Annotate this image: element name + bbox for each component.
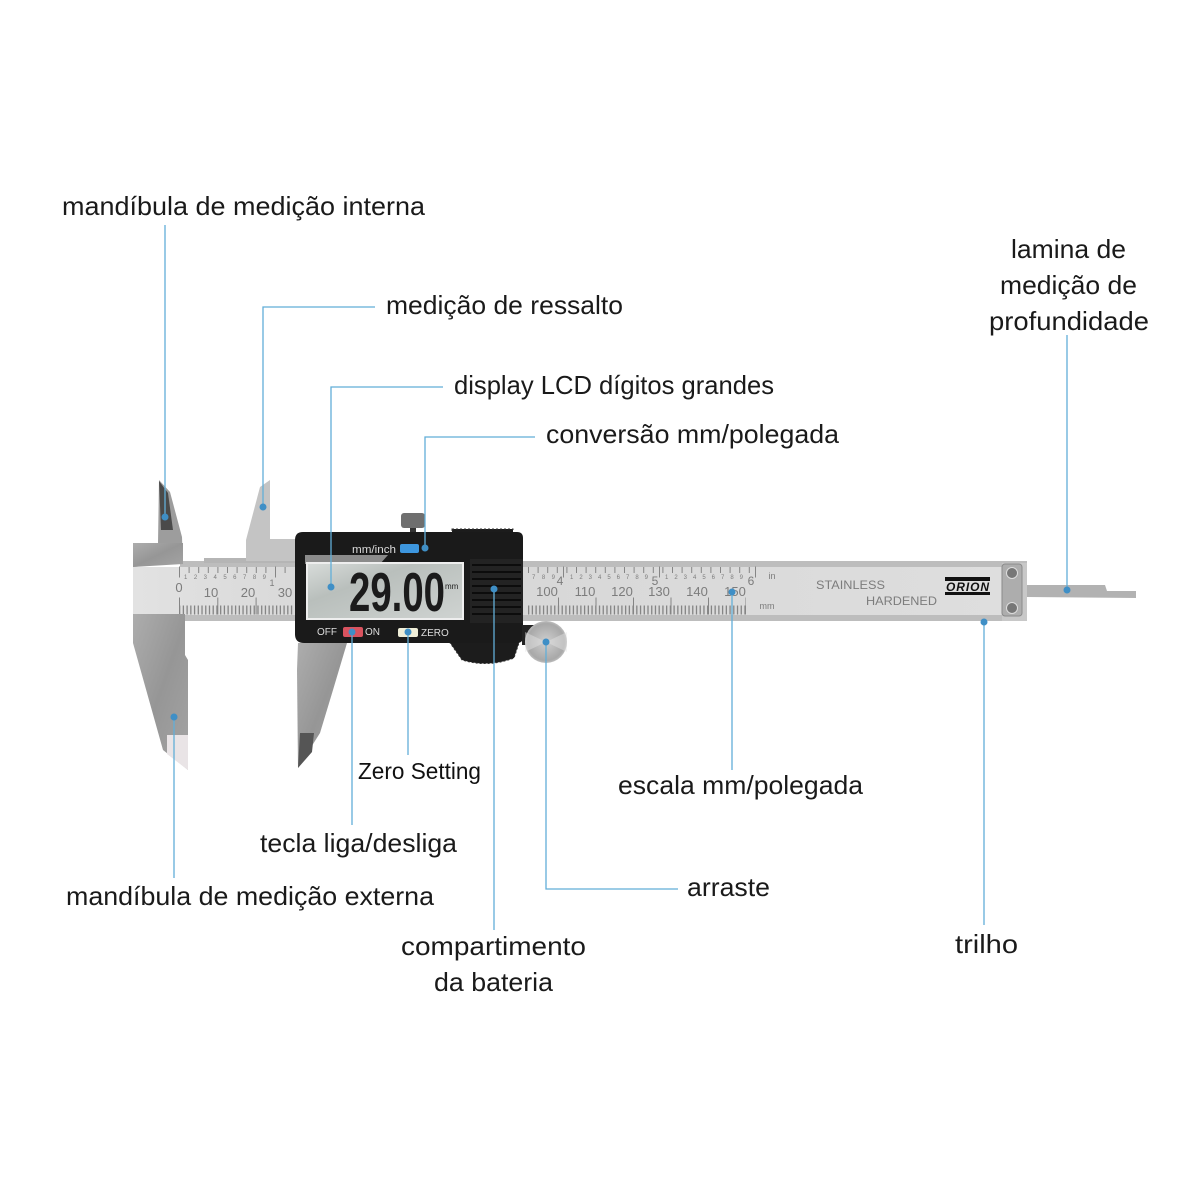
leader: thumb drag (542, 638, 678, 889)
LCD reading: 29.00 (349, 561, 445, 623)
ZERO label: ZERO (421, 628, 449, 639)
thumb screw (401, 513, 425, 533)
scale numbers (175, 571, 776, 611)
OFF label: OFF (317, 627, 337, 638)
label: depth measuring blade: profundidade (989, 306, 1149, 336)
display reflection (305, 555, 388, 564)
label: on/off key: tecla liga/desliga (260, 828, 458, 858)
label: battery compartment: da bateria (434, 967, 554, 997)
scale numbers: 10 (204, 585, 218, 600)
fixed lower jaw (133, 614, 188, 770)
scale numbers: 120 (611, 584, 633, 599)
caliper illustration (133, 480, 1136, 770)
fixed jaw shoulder (133, 543, 183, 567)
scale numbers: 100 (536, 584, 558, 599)
scale numbers: 1 2 3 4 5 6 7 8 9 (570, 575, 649, 581)
label: LCD display: display LCD dígitos grandes (454, 370, 774, 400)
scale numbers: 4 (557, 574, 564, 588)
leader: LCD display (328, 387, 443, 590)
movable jaw dark tip (298, 733, 314, 768)
scale numbers: 150 (724, 584, 746, 599)
scale numbers: 130 (648, 584, 670, 599)
main beam (133, 558, 1027, 621)
fixed jaw dark inset (159, 481, 173, 530)
battery compartment grip (470, 559, 523, 623)
rail printed text: HARDENED (866, 594, 937, 608)
label: depth measuring blade (989, 234, 1149, 336)
movable upper jaw (246, 480, 296, 561)
lower wheel (448, 640, 520, 664)
leader: zero setting (404, 628, 412, 755)
display housing (295, 532, 523, 643)
mm/inch label: mm/inch (352, 544, 396, 556)
zero button (398, 628, 418, 637)
label: inner measuring jaw: mandíbula de medição interna (62, 191, 426, 221)
leader: mm/inch conversion (422, 437, 535, 552)
leader: step measurement (260, 307, 375, 510)
leader: mm/inch scale (728, 588, 736, 770)
label: outer measuring jaw: mandíbula de medição externa (66, 881, 435, 911)
label: mm/inch scale: escala mm/polegada (618, 770, 864, 800)
leader: rail (980, 618, 988, 925)
leader: on/off key (348, 628, 356, 825)
ORION logo: ORION (946, 580, 989, 594)
top knurl (452, 529, 513, 535)
scale numbers: 1 2 3 4 5 6 7 8 9 (665, 575, 744, 581)
LCD unit: mm (445, 582, 459, 591)
label: depth measuring blade: lamina de (1011, 234, 1126, 264)
rail printed text (816, 578, 937, 608)
end plate with screws (1002, 563, 1027, 621)
label: depth measuring blade: medição de (1000, 270, 1137, 300)
label: mm/inch conversion: conversão mm/polegada (546, 419, 840, 449)
depth measuring blade (1027, 585, 1136, 598)
scale numbers: 7 8 9 (532, 575, 556, 581)
label: battery compartment: compartimento (401, 931, 586, 961)
scale numbers: 140 (686, 584, 708, 599)
label: rail: trilho (955, 929, 1018, 959)
fixed jaw light tip (167, 735, 188, 770)
on/off button (343, 627, 363, 637)
leader: depth blade (1064, 335, 1070, 594)
ON label: ON (365, 627, 380, 638)
label: battery compartment (401, 931, 586, 997)
scale numbers: 6 (748, 574, 755, 588)
leader: inner jaw (162, 225, 168, 520)
scale numbers: 0 (175, 580, 183, 595)
slider knob (522, 621, 567, 663)
label: thumb drag: arraste (687, 872, 770, 902)
fixed upper jaw (133, 480, 183, 567)
scale numbers: in (768, 571, 776, 581)
label: zero setting: Zero Setting (358, 758, 481, 784)
LCD screen (307, 563, 463, 619)
scale numbers: 1 2 3 4 5 6 7 8 9 (184, 575, 267, 581)
upper mm/inch scale ticks (179, 570, 756, 610)
scale numbers: mm (760, 601, 774, 611)
label: step measurement: medição de ressalto (386, 290, 623, 320)
leader: battery compartment (490, 586, 498, 930)
scale numbers: 20 (241, 585, 255, 600)
scale numbers: 110 (575, 584, 595, 599)
mm/inch button (400, 544, 419, 553)
scale numbers: 1 (269, 578, 275, 588)
rail printed text: STAINLESS (816, 578, 885, 592)
movable lower jaw (297, 643, 347, 768)
leader: outer jaw (170, 714, 178, 878)
scale numbers: 30 (278, 585, 292, 600)
scale numbers: 5 (652, 574, 659, 588)
